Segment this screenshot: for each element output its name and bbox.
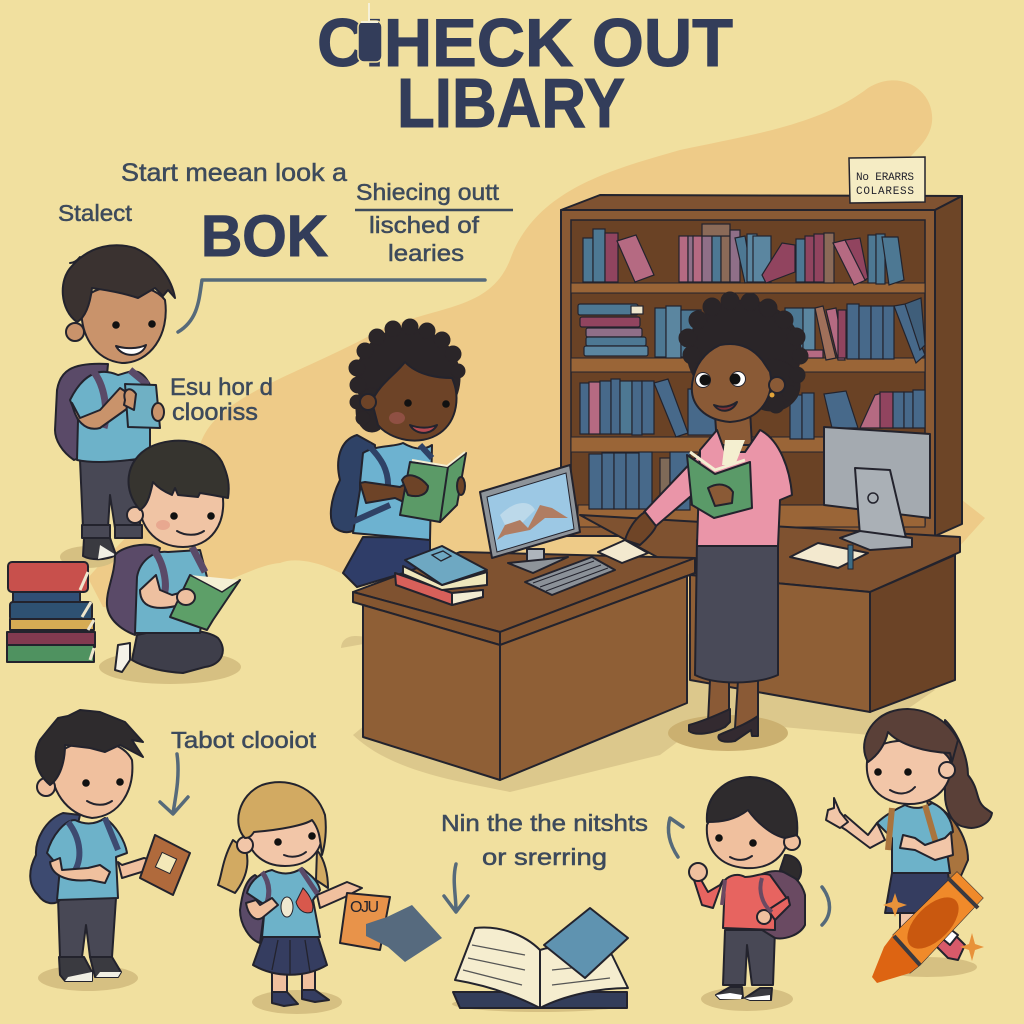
papers and pen (790, 543, 868, 569)
face (692, 344, 771, 422)
text: or srerring: or srerring (482, 844, 607, 870)
panel: librarian (625, 292, 808, 751)
sparkle right (960, 933, 984, 961)
head (867, 741, 951, 804)
panel: blonde girl: OJU (350, 899, 379, 916)
sparkle left (883, 893, 907, 917)
sign: no erasers: No ERARRS (856, 172, 914, 184)
panel: desk monitor (480, 465, 580, 573)
title: LIBARY (397, 64, 625, 142)
book (400, 453, 466, 522)
panel: blonde girl (218, 782, 390, 1014)
shadow under crayon (877, 957, 977, 977)
head (248, 812, 322, 866)
heading: bok: BOK (201, 204, 328, 269)
head (81, 285, 166, 363)
arrow: up to girl (668, 818, 683, 857)
text: shiecing out: Shiecing outt (356, 179, 500, 205)
text: lisched of: lisched of (369, 212, 480, 238)
keyboard (525, 557, 615, 595)
book (125, 384, 160, 428)
title: CIHECK OUT (317, 5, 733, 81)
books: second shelf (578, 298, 925, 363)
arrow: down to boy's book (160, 754, 188, 814)
text: learies: learies (388, 240, 464, 266)
books: third shelf (580, 379, 925, 439)
brown book (140, 835, 190, 895)
orange paper (340, 893, 390, 950)
panel: standing boy (55, 245, 175, 559)
panel: right desk (580, 515, 960, 712)
panel: kneeling boy (107, 441, 240, 673)
pigtails (218, 840, 247, 893)
curve mark (822, 887, 830, 925)
sign: no erasers (849, 157, 925, 203)
book stack on desk (395, 546, 487, 605)
head (51, 741, 132, 818)
panel: long-haired girl (826, 709, 992, 960)
books: bottom shelf (589, 452, 690, 510)
face (372, 362, 456, 441)
pointing arm (838, 815, 885, 848)
panel: dark-haired girl (689, 777, 805, 1011)
books: top shelf (583, 224, 904, 285)
icon: book pile (7, 562, 95, 662)
panel: bookshelf (561, 195, 962, 536)
panel: boy with book bottom-left (30, 710, 190, 991)
text: nin the the nitshts: Nin the the nitshts (441, 810, 648, 836)
shadow under kneeling boy (99, 650, 241, 684)
hair (349, 319, 465, 432)
desk papers (598, 540, 648, 563)
icon: orange crayon (872, 872, 983, 983)
hair (679, 292, 808, 413)
text: start mean look: Start meean look a (121, 159, 347, 187)
text: clooriss: clooriss (172, 399, 258, 426)
book (170, 575, 240, 630)
panel: front desk (353, 552, 695, 780)
text: stalect: Stalect (58, 200, 133, 226)
neck (715, 410, 752, 445)
panel: girl with green book (331, 319, 466, 587)
text: esu hor d: Esu hor d (170, 374, 273, 401)
icon: crayon in title (358, 3, 382, 62)
blazer (697, 430, 792, 546)
arrow: down to book (444, 864, 468, 912)
text: tabot clooiot: Tabot clooiot (171, 727, 317, 753)
shadow: desks (341, 620, 935, 792)
hair back (945, 720, 992, 828)
right arm (900, 832, 953, 860)
panel: gray monitor (824, 427, 930, 550)
callout line (178, 280, 485, 332)
title (317, 3, 733, 142)
green book (687, 455, 752, 518)
head (139, 475, 223, 547)
arm (72, 388, 132, 429)
shadow under standing boy (60, 546, 116, 568)
icon: open book (452, 908, 628, 1012)
arrow: gray block (366, 905, 442, 962)
hand on desk (625, 512, 656, 545)
sign: no erasers: COLARESS (856, 186, 914, 198)
head (707, 808, 789, 868)
backpack (55, 364, 108, 460)
